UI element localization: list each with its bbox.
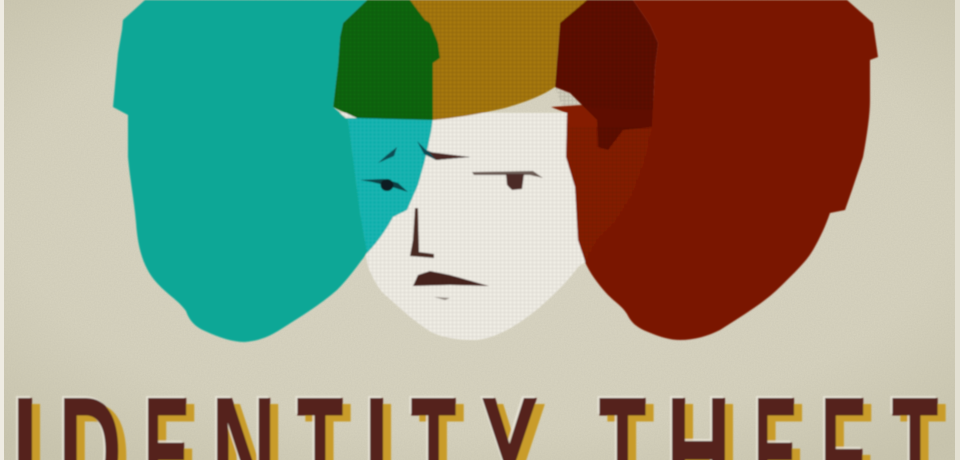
lower lip shadow bbox=[434, 297, 450, 300]
gold hair bbox=[405, 0, 590, 120]
nose bbox=[410, 208, 434, 258]
red overlap grid texture bbox=[551, 0, 658, 264]
central portrait: three overlapping heads bbox=[113, 0, 878, 343]
dark red hair overlap bbox=[555, 0, 658, 150]
red head bbox=[585, 0, 878, 340]
left eyebrow in teal bbox=[378, 147, 397, 163]
teal overlap over face bbox=[340, 118, 433, 270]
gold hair grid texture bbox=[405, 0, 590, 120]
left eye bbox=[360, 179, 408, 192]
teal head bbox=[113, 0, 367, 342]
green hair grid texture bbox=[333, 0, 440, 120]
central face bbox=[340, 113, 585, 340]
teal overlap grid texture bbox=[340, 118, 433, 270]
title: IDENTITY THEFT bbox=[12, 363, 938, 460]
green hair overlap bbox=[333, 0, 440, 120]
red overlap over face bbox=[551, 100, 660, 264]
central face grid texture bbox=[340, 113, 585, 343]
mouth bbox=[413, 271, 489, 286]
right eye bbox=[472, 171, 543, 190]
central eyebrow bbox=[417, 141, 470, 160]
